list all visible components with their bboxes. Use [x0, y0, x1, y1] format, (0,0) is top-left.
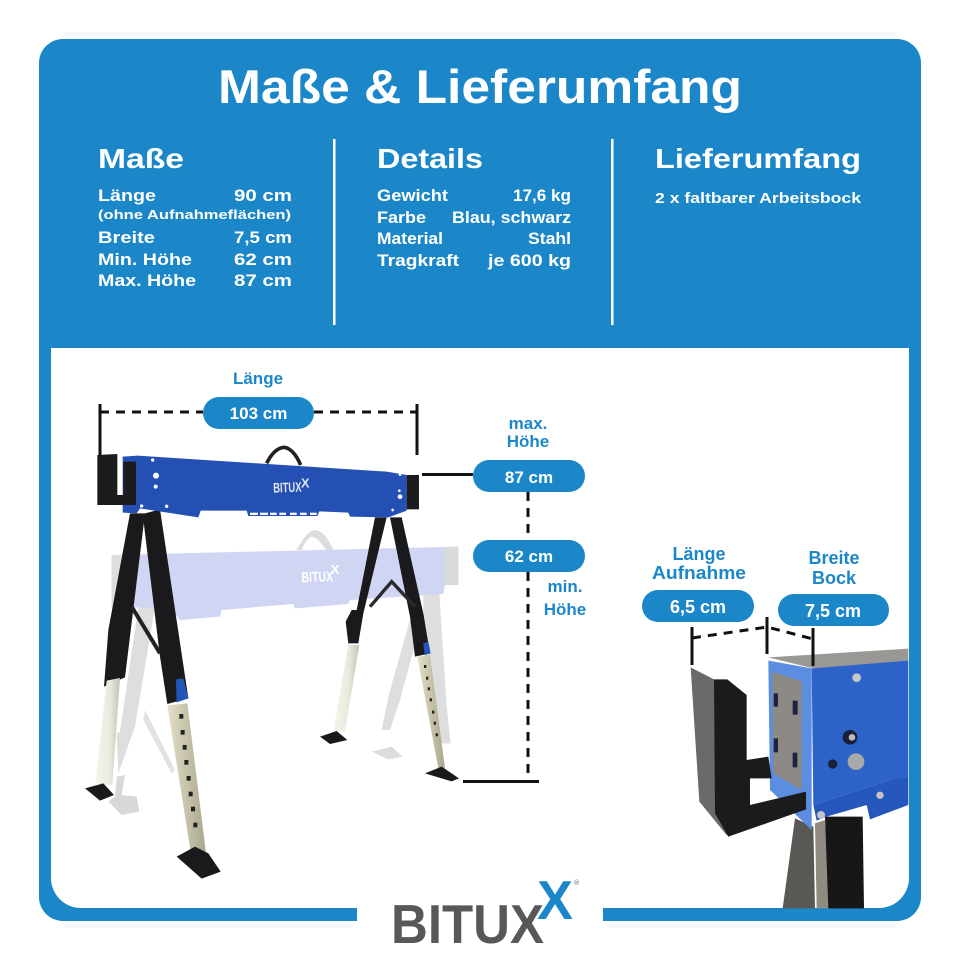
end brackets — [97, 454, 136, 505]
panel: Maße: Maße — [98, 143, 184, 174]
blue beam — [123, 456, 407, 517]
dimension: Breite Bock: Breite — [808, 548, 860, 568]
beam logo: BITUX — [273, 479, 302, 496]
panel: Details: Stahl — [528, 230, 571, 248]
panel: Maße: Breite — [98, 229, 155, 247]
panel: Details: Blau, schwarz — [452, 209, 571, 227]
panel: Lieferumfang — [655, 143, 862, 207]
dimension: maximum height — [422, 414, 585, 492]
dimension: maximum height: max. — [509, 414, 547, 433]
panel: Details: Tragkraft — [377, 252, 460, 270]
dimension: Länge Aufnahme: Länge — [672, 544, 726, 564]
black receiver — [714, 679, 806, 837]
right back leg — [346, 517, 387, 643]
bolts — [817, 673, 884, 819]
panel: Maße: 90 cm — [234, 187, 292, 205]
dimension: Breite Bock — [778, 548, 889, 626]
dimension: minimum height: min. — [548, 577, 582, 596]
panel: Maße: Min. Höhe — [98, 251, 192, 269]
panel: Maße: Länge — [98, 187, 156, 205]
logo: ® — [574, 879, 580, 887]
dimension: Länge: 103 cm — [230, 404, 287, 423]
dimension: Länge — [100, 369, 417, 455]
title: Maße & Lieferumfang — [218, 60, 742, 113]
dimension: vertical dashed height line — [526, 492, 530, 781]
panel: Details: Gewicht — [377, 187, 449, 205]
dimension: Breite Bock: Bock — [812, 568, 857, 588]
steel plate — [772, 672, 802, 790]
panel: Details: 17,6 kg — [513, 187, 571, 205]
beam top — [768, 649, 908, 668]
dimension: Länge: Länge — [233, 369, 283, 388]
right front leg — [390, 517, 430, 657]
logo — [391, 869, 580, 955]
main sawhorse at maximum height: X — [301, 477, 310, 491]
dimension: minimum height: 62 cm — [505, 547, 553, 566]
support legs — [783, 818, 815, 908]
dimension: Länge Aufnahme — [642, 544, 754, 622]
panel: Details: je 600 kg — [487, 252, 571, 270]
panel: Details — [377, 143, 571, 270]
panel: Maße: 7,5 cm — [234, 229, 292, 247]
panel: Maße: 62 cm — [234, 251, 292, 269]
dimension: maximum height: 87 cm — [505, 468, 553, 487]
panel: Details: Farbe — [377, 209, 426, 227]
panel: Maße: (ohne Aufnahmeflächen) — [98, 207, 291, 222]
panel: Maße: Max. Höhe — [98, 272, 196, 290]
handle — [267, 447, 301, 465]
panel: Lieferumfang: Lieferumfang — [655, 143, 861, 174]
dimension: maximum height: Höhe — [507, 432, 549, 451]
logo: X — [537, 869, 573, 931]
grey receiver side — [691, 667, 727, 836]
left front leg — [143, 509, 188, 704]
panel: Details: Details — [377, 143, 483, 174]
faded sawhorse at minimum height: BITUX — [301, 569, 334, 586]
dimension: Länge Aufnahme: 6,5 cm — [670, 597, 726, 617]
dimension: Breite Bock: 7,5 cm — [805, 601, 861, 621]
panel: Lieferumfang: 2 x faltbarer Arbeitsbock — [655, 191, 862, 207]
faded sawhorse at minimum height — [108, 530, 458, 815]
faded sawhorse at minimum height: X — [331, 562, 340, 577]
panel: Maße: 87 cm — [234, 272, 292, 290]
dimension lines for detail photo — [692, 617, 813, 666]
divider right — [611, 139, 614, 325]
divider left — [333, 139, 336, 325]
panel: Details: Material — [377, 230, 443, 248]
panel: Maße — [98, 143, 292, 290]
main sawhorse at maximum height — [85, 447, 459, 879]
dimension: Länge Aufnahme: Aufnahme — [652, 563, 746, 583]
left back leg — [104, 513, 145, 687]
detail photo: receiver bracket — [691, 649, 908, 908]
logo: BITUX — [391, 893, 544, 955]
blue body — [812, 661, 908, 805]
dimension: minimum height: Höhe — [544, 600, 586, 619]
dimension: minimum height — [463, 540, 586, 782]
